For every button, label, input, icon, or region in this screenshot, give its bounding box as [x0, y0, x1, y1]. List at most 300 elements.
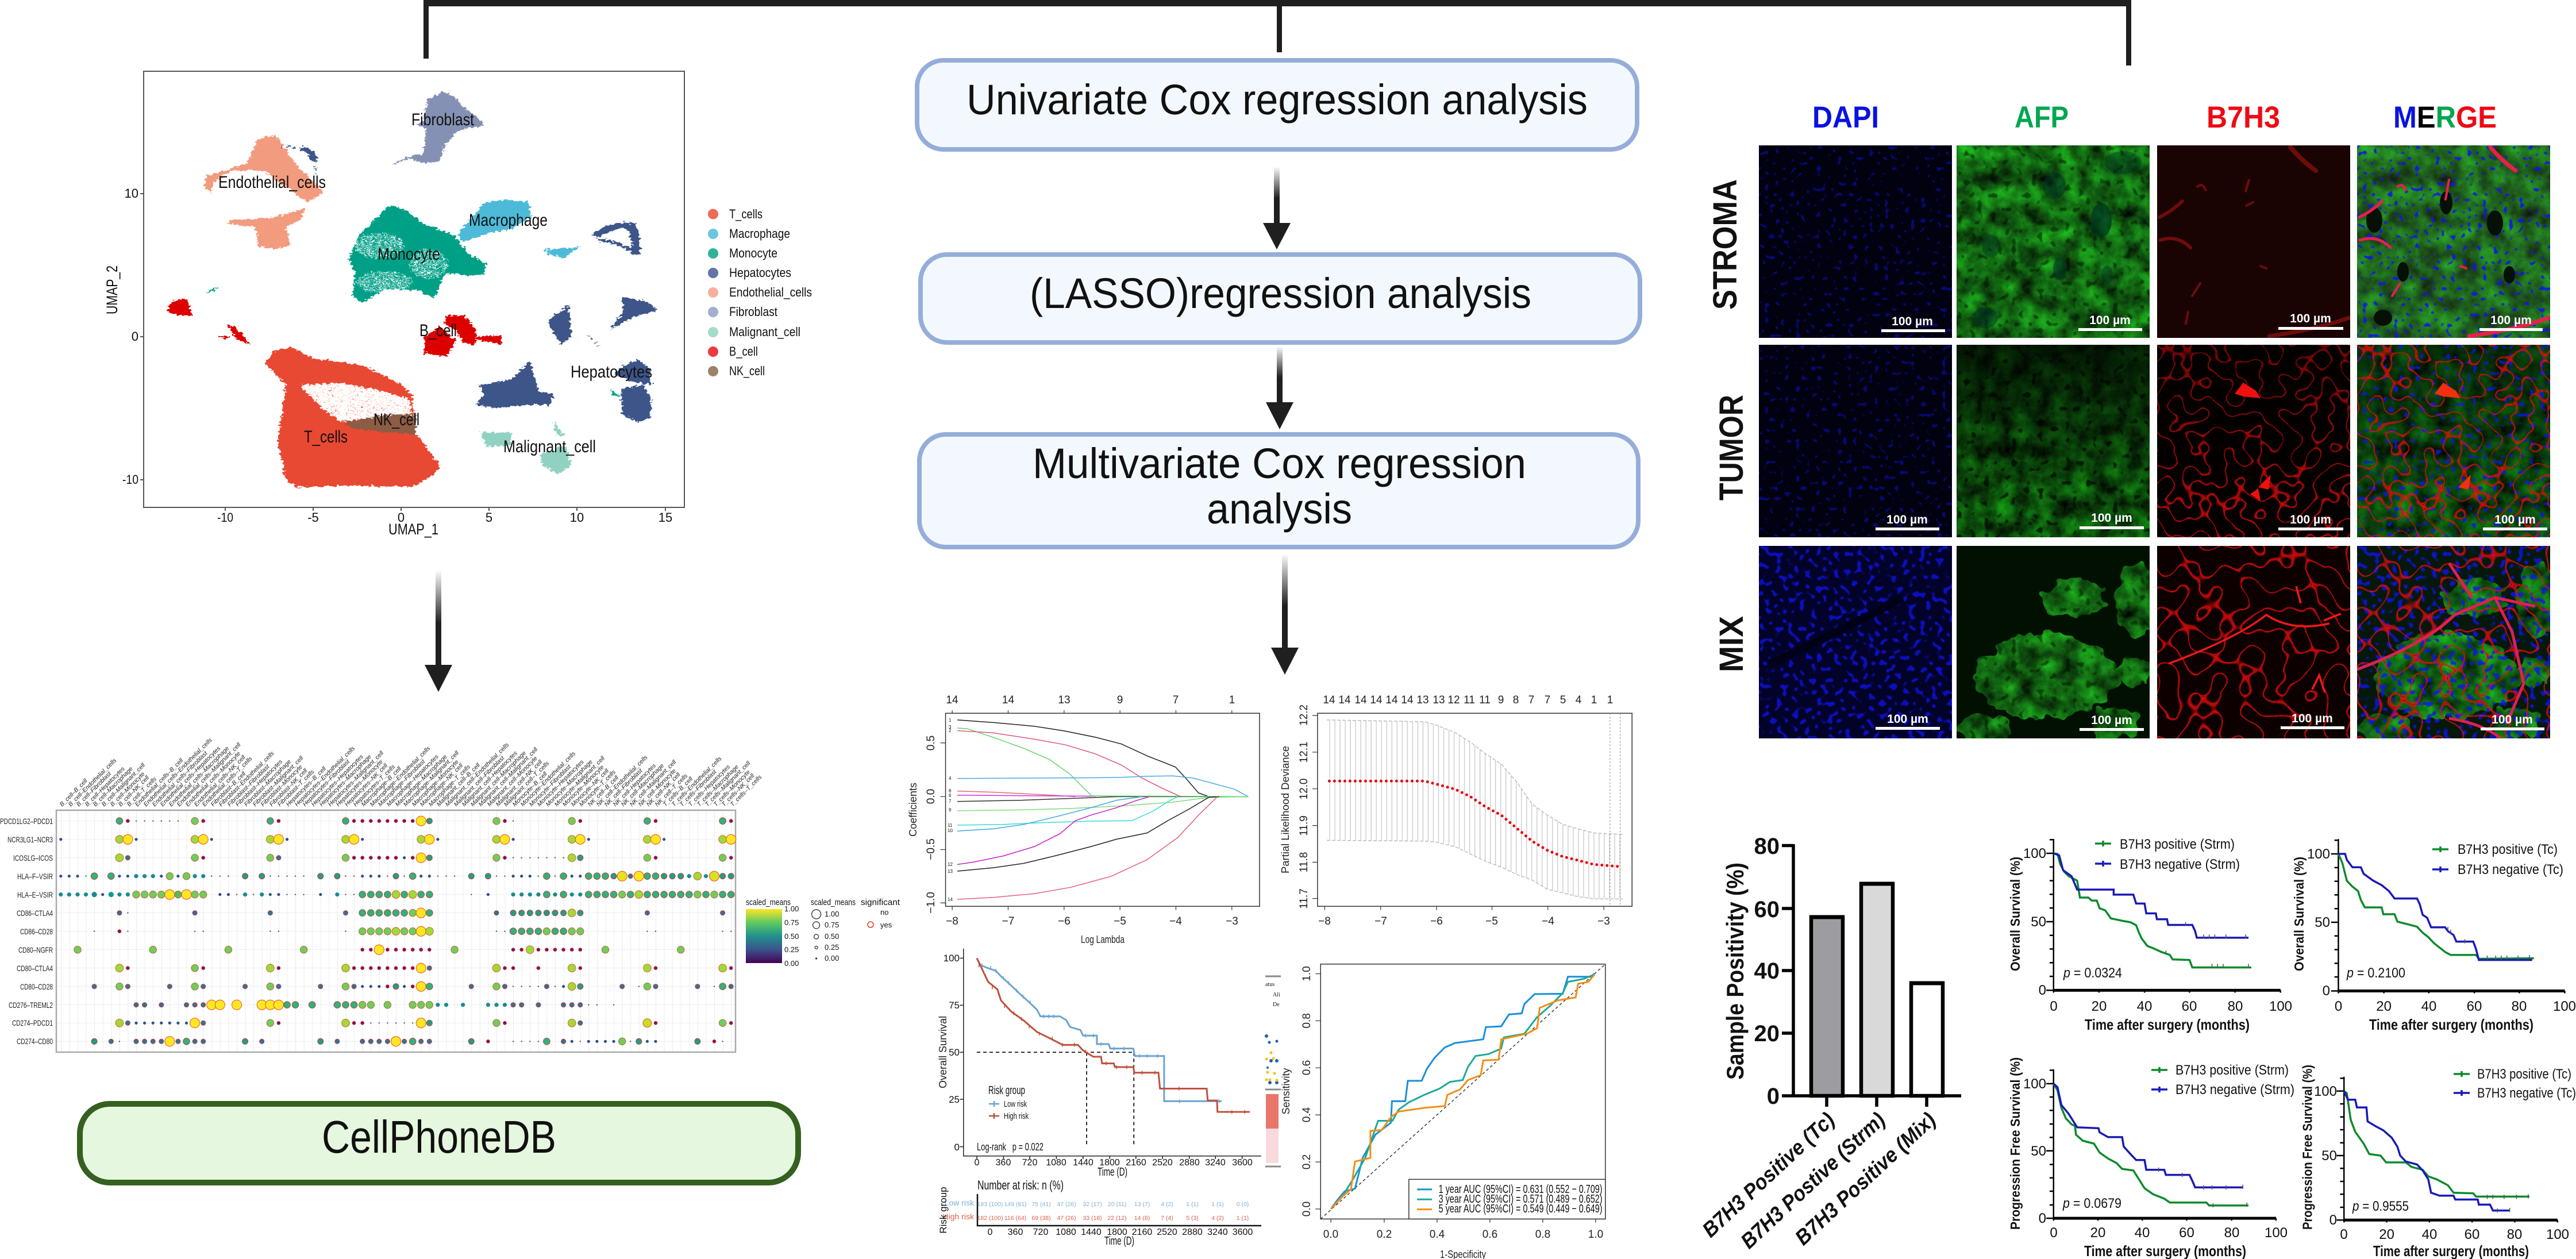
dot plot size legend: 1.00 [825, 910, 839, 918]
panel: sample positivity bar chart [1698, 834, 1961, 1253]
column labels: Endothelial_cells–Monocyte [184, 750, 242, 808]
axis numbers: 60 [2465, 1227, 2479, 1242]
column labels: NK_cell–B_cell [587, 774, 621, 808]
deviance curve with error bars [1312, 713, 1632, 910]
row labels [1707, 179, 1750, 672]
column labels: Malignant_cell–Monocyte [486, 755, 539, 808]
axis numbers [2023, 1076, 2288, 1241]
column labels: NK_cell–Malignant_cell [629, 759, 678, 808]
dot plot colour legend: scaled_means [746, 898, 791, 907]
column labels: Endothelial_cells–Malignant_cell [176, 741, 242, 808]
column labels: NK_cell–T_cells [654, 772, 690, 808]
deviance axis labels: 8 [1513, 694, 1519, 706]
axis numbers: 0 [2039, 1211, 2046, 1226]
KM axis labels: 3600 [1232, 1158, 1253, 1168]
coefficient axis labels: 13 [1058, 694, 1071, 706]
cluster: B cell [168, 299, 501, 357]
column labels: B_cell–NK_cell [117, 774, 151, 808]
UMAP cluster labels: T_cells [304, 428, 348, 446]
panel: LASSO cross-validation [1280, 694, 1632, 927]
KM axis labels: Time (D) [1098, 1166, 1127, 1179]
axis numbers: 20 [2379, 1227, 2394, 1242]
UMAP axes: 15 [659, 510, 672, 525]
survival curves [2337, 1077, 2558, 1222]
column labels: Endothelial_cells–Macrophage [168, 745, 230, 808]
panel: overall survival, tumor cells [2292, 839, 2576, 1033]
UMAP axes: -10 [217, 510, 233, 525]
column labels: Monocyte–Monocyte [561, 764, 606, 808]
UMAP legend: Hepatocytes [729, 265, 791, 280]
column labels: NK_cell–Monocyte [637, 768, 677, 808]
column labels: Endothelial_cells–B_cell [134, 757, 185, 808]
curve index labels: 2 [949, 728, 952, 733]
axis numbers: 100 [2553, 999, 2576, 1014]
ROC axis labels: 0.6 [1483, 1229, 1497, 1241]
column labels: Malignant_cell–B_cell [436, 761, 482, 808]
legend: B7H3 positive (Tc) [2458, 842, 2558, 857]
axis numbers [2307, 846, 2576, 1014]
deviance axis labels: 11.9 [1298, 815, 1310, 836]
dot plot significance legend: yes [880, 921, 892, 929]
p value: p = 0.0324 [2063, 965, 2122, 981]
UMAP cluster labels: B_cell [419, 321, 457, 340]
column labels: B_cell–Macrophage [92, 765, 134, 808]
axis numbers: 0 [2039, 983, 2046, 998]
low risk row: 0 (0) [1237, 1201, 1249, 1208]
row labels: MIX [1713, 616, 1750, 672]
T cells speckle [299, 383, 412, 421]
deviance axis labels: 14 [1401, 694, 1414, 706]
dot plot colour legend: 0.75 [784, 918, 799, 927]
axis titles: Time after surgery (months) [2369, 1016, 2533, 1033]
KM legend: Risk group [988, 1084, 1025, 1097]
box: multivariate Cox [919, 434, 1638, 547]
UMAP legend: Endothelial_cells [729, 285, 812, 299]
axis numbers: 0 [2329, 1212, 2337, 1228]
panel: progression free survival, tumor cells [2300, 1065, 2576, 1259]
axis numbers: 100 [2023, 1076, 2046, 1092]
high risk row: 33 (18) [1083, 1215, 1102, 1222]
arrow: UMAP to dot plot [425, 570, 452, 692]
coefficient axis labels: −8 [946, 915, 958, 927]
column labels: Monocyte–NK_cell [570, 767, 610, 808]
UMAP cluster labels: NK_cell [373, 410, 419, 429]
axis titles [2292, 857, 2533, 1033]
curve index labels: 7 [949, 799, 952, 804]
column labels: Hepatocytes–Hepatocytes [310, 753, 365, 808]
curve index labels [948, 718, 953, 902]
axis numbers: 0 [2050, 999, 2058, 1014]
row labels: HLA–F–VSIR [17, 872, 53, 881]
p value: p = 0.0679 [2062, 1196, 2121, 1211]
legend: B7H3 positive (Strm) [2120, 837, 2235, 852]
column labels: T_cells–B_cell [662, 775, 694, 808]
scale bars: 100 µm [2292, 712, 2333, 725]
deviance axis labels: 14 [1370, 694, 1383, 706]
axis titles: Overall Survival (%) [2292, 857, 2307, 971]
coefficient axis labels: 1 [1229, 694, 1235, 706]
high risk row: 22 (12) [1107, 1215, 1127, 1222]
row labels: CD80–CD28 [20, 982, 53, 991]
deviance axis labels: 11 [1479, 694, 1491, 706]
column labels: Fibroblast–Hepatocytes [234, 758, 284, 808]
scale bars: 100 µm [2290, 513, 2331, 526]
low risk row: 32 (17) [1083, 1201, 1102, 1208]
axis numbers: 50 [2321, 1148, 2337, 1164]
dot plot size legend: 0.00 [825, 954, 839, 962]
cluster: monocyte [206, 205, 621, 396]
legend [2454, 1067, 2576, 1101]
hepatocyte thin arcs [282, 147, 636, 348]
column labels: T_cells–NK_cell [721, 772, 756, 808]
UMAP legend: B_cell [729, 344, 758, 359]
column labels: NK_cell–Hepatocytes [612, 762, 658, 808]
axis numbers: 100 [2023, 846, 2046, 861]
log-rank p value: Log-rank p = 0.022 [977, 1141, 1044, 1153]
column labels: Monocyte–Fibroblast [528, 763, 573, 808]
axis numbers: 40 [2137, 999, 2152, 1014]
axis titles: Time after surgery (months) [2085, 1016, 2250, 1033]
column labels: Hepatocytes–Fibroblast [302, 758, 352, 808]
coefficient axis labels [907, 694, 1238, 945]
low risk row: 1 (1) [1186, 1201, 1199, 1208]
bar chart tick labels: 20 [1754, 1021, 1780, 1046]
low risk row: 47 (26) [1057, 1201, 1076, 1208]
axis numbers: 40 [2135, 1225, 2150, 1241]
deviance axis labels: −4 [1542, 915, 1554, 927]
column labels: Fibroblast–B_cell [210, 770, 248, 808]
curve index labels: 3 [949, 725, 952, 730]
panel: risk score sliver: De [1273, 1002, 1280, 1008]
coefficient axis labels: 0.5 [925, 736, 937, 750]
KM axis labels: 2520 [1152, 1158, 1173, 1168]
dot plot size legend: scaled_means [811, 898, 856, 907]
axis numbers: 0 [2335, 999, 2342, 1014]
column labels: Monocyte–Malignant_cell [553, 754, 606, 808]
column labels: Fibroblast–Endothelial_cells [218, 750, 276, 808]
high risk row: 5 (3) [1186, 1215, 1199, 1222]
bar chart y-axis title: Sample Positivity (%) [1722, 863, 1749, 1080]
panel: progression free survival, stroma [2008, 1057, 2294, 1259]
dot plot frame [56, 810, 736, 1052]
UMAP cluster labels: Monocyte [378, 245, 440, 264]
curve index labels: 10 [948, 828, 953, 833]
ROC legend text: 3 year AUC (95%CI) = 0.571 (0.489 − 0.652) [1439, 1193, 1603, 1206]
column labels: B_cell–Monocyte [109, 771, 147, 808]
column labels: Macrophage–B_cell [360, 765, 403, 808]
box: univariate Cox [917, 60, 1637, 149]
KM axis labels: 75 [949, 1000, 960, 1011]
sliver scatter dots [1265, 1034, 1279, 1084]
tile: stroma merge [2357, 145, 2550, 338]
bar chart tick labels: 0 [1767, 1084, 1780, 1109]
low risk row [945, 1198, 1249, 1208]
axis numbers: 0 [2050, 1225, 2058, 1241]
deviance axis labels: −5 [1485, 915, 1498, 927]
channel headers: DAPI [1812, 101, 1879, 134]
column labels: Macrophage–Hepatocytes [386, 753, 440, 808]
dot matrix [59, 816, 736, 1046]
bar top caps [1809, 884, 1944, 983]
dot plot significance legend [861, 898, 900, 929]
row labels [0, 817, 53, 1046]
column labels: Macrophage–Monocyte [411, 759, 460, 808]
deviance axis labels: −3 [1597, 915, 1610, 927]
ROC axis labels: 0.4 [1301, 1107, 1313, 1122]
column labels: Hepatocytes–NK_cell [344, 762, 390, 808]
column labels: Hepatocytes–B_cell [285, 765, 328, 808]
panel: immunofluorescence grid [1707, 101, 2550, 738]
dot plot significance legend: no [880, 908, 888, 917]
CellPhoneDB label box [80, 1104, 798, 1183]
ROC axis labels: 0.0 [1323, 1229, 1338, 1241]
column labels: Hepatocytes–Malignant_cell [327, 749, 385, 808]
low risk row: 1 (1) [1211, 1201, 1224, 1208]
deviance axis labels: 13 [1416, 694, 1429, 706]
cluster: macrophage [457, 200, 582, 257]
survival curves [2046, 1069, 2276, 1221]
bar chart category labels: B7H3 Positive (Tc) [1698, 1108, 1839, 1242]
deviance axis labels: 1 [1591, 694, 1597, 706]
column labels: Endothelial_cells–T_cells [201, 755, 254, 808]
KM axis labels: 25 [949, 1094, 960, 1105]
coefficient axis labels: 9 [1117, 694, 1123, 706]
column labels: Monocyte–B_cell [511, 771, 549, 808]
tile: tumor DAPI [1759, 345, 1952, 537]
channel headers: AFP [2015, 101, 2069, 134]
ROC axis labels: 0.8 [1301, 1013, 1313, 1029]
column labels: Fibroblast–Malignant_cell [252, 754, 305, 808]
axis numbers: 80 [2224, 1225, 2239, 1241]
deviance axis labels: 14 [1385, 694, 1398, 706]
axis numbers: 50 [2031, 914, 2046, 930]
deviance axis labels [1280, 694, 1613, 927]
column labels: B_cell–Endothelial_cells [67, 757, 118, 808]
UMAP cluster labels: Macrophage [469, 211, 548, 230]
risk table axis labels: 360 [1008, 1227, 1023, 1237]
risk table axis labels: 2880 [1182, 1227, 1203, 1237]
UMAP axes: 0 [398, 510, 405, 525]
axis numbers: 100 [2265, 1225, 2288, 1241]
deviance axis labels: 1 [1607, 694, 1613, 706]
UMAP axes: 10 [125, 186, 138, 201]
UMAP legend: Macrophage [729, 226, 790, 241]
scale bars: 100 µm [2089, 314, 2131, 327]
coefficient axis labels: Log Lambda [1081, 934, 1125, 945]
KM axis labels: 0 [954, 1142, 960, 1153]
coefficient axis labels: −3 [1226, 915, 1238, 927]
axis numbers: 60 [2179, 1225, 2194, 1241]
cluster: malignant cell [482, 421, 572, 474]
column labels: Monocyte–T_cells [578, 768, 617, 808]
cluster: endothelial cells [205, 135, 323, 249]
column labels: Malignant_cell–T_cells [503, 760, 551, 808]
column labels: T_cells–Hepatocytes [687, 763, 732, 808]
deviance axis labels: 14 [1323, 694, 1335, 706]
column labels: Macrophage–Macrophage [394, 753, 449, 808]
column labels: B_cell–Hepatocytes [84, 765, 126, 808]
ROC legend text: 1 year AUC (95%CI) = 0.631 (0.552 − 0.709) [1439, 1183, 1603, 1196]
ROC axis labels: 1.0 [1588, 1229, 1603, 1241]
tile: mix AFP [1957, 546, 2150, 738]
column labels: NK_cell–Endothelial_cells [595, 754, 649, 808]
scale bars: 100 µm [2494, 513, 2536, 526]
tile: stroma DAPI [1759, 145, 1952, 338]
column labels: Endothelial_cells–NK_cell [193, 754, 247, 808]
axis numbers: 100 [2314, 1084, 2337, 1099]
coefficient curves [941, 710, 1260, 910]
survival curves [2046, 839, 2281, 993]
coefficient axis labels: 0.0 [925, 789, 937, 804]
box: LASSO regression: (LASSO)regression analysis [1030, 269, 1531, 317]
row labels: CD274–CD80 [17, 1037, 53, 1046]
ROC axis labels: 0.4 [1430, 1229, 1445, 1241]
row labels: CD86–CD28 [20, 927, 53, 936]
UMAP axes: UMAP_1 [388, 521, 438, 538]
deviance axis labels: 12.0 [1298, 779, 1310, 799]
row labels: NCR3LG1–NCR3 [7, 835, 53, 844]
low risk row: 13 (7) [1134, 1201, 1150, 1208]
axis numbers: 20 [2376, 999, 2392, 1014]
KM axis labels [937, 953, 1253, 1179]
column labels: Macrophage–Fibroblast [377, 758, 427, 808]
KM axis labels: 50 [949, 1047, 960, 1058]
axis numbers: 80 [2507, 1227, 2522, 1242]
axis numbers [2314, 1084, 2569, 1242]
bar chart tick labels: 80 [1754, 834, 1780, 859]
risk table axis labels: 3600 [1233, 1227, 1253, 1237]
deviance axis labels: 14 [1338, 694, 1351, 706]
cluster: fibroblast [391, 91, 484, 165]
row labels: CD80–CTLA4 [17, 964, 53, 973]
panel: CellPhoneDB dot plot [0, 737, 900, 1052]
dot plot significance legend: significant [861, 898, 900, 907]
deviance axis labels: 4 [1576, 694, 1582, 706]
curve index labels: 11 [948, 823, 953, 828]
arrow: multivariate to plots [1271, 553, 1299, 675]
p value: p = 0.2100 [2346, 965, 2405, 981]
cluster: hepatocytes [476, 297, 659, 422]
deviance axis labels: 12.2 [1298, 704, 1310, 726]
coefficient axis labels: −7 [1002, 915, 1014, 927]
axis numbers: 100 [2546, 1227, 2569, 1242]
tile: stroma AFP [1957, 145, 2150, 338]
column labels: Malignant_cell–Fibroblast [453, 754, 506, 808]
risk table axis labels: 2520 [1157, 1227, 1177, 1237]
dot plot size legend: 0.50 [825, 932, 839, 941]
KM axis labels: 100 [944, 953, 960, 964]
column labels: NK_cell–Fibroblast [603, 767, 644, 808]
ROC axis labels: Sensitivity [1280, 1068, 1292, 1115]
UMAP axes: 0 [132, 329, 138, 344]
column labels: Fibroblast–Macrophage [243, 759, 292, 808]
column labels: Hepatocytes–Endothelial_cells [294, 745, 357, 808]
high risk row: 14 (8) [1134, 1215, 1150, 1222]
legend: B7H3 negative (Strm) [2120, 857, 2240, 872]
curve index labels: 13 [948, 869, 953, 874]
axis numbers [2023, 846, 2292, 1014]
axis numbers: 40 [2422, 1227, 2437, 1242]
high risk row: 1 (1) [1237, 1215, 1249, 1222]
risk table axis labels: 0 [988, 1227, 993, 1237]
risk table axis labels: 2160 [1132, 1227, 1152, 1237]
bar chart category labels: B7H3 Postive (Strm) [1736, 1108, 1889, 1253]
column labels: B_cell–Malignant_cell [101, 761, 147, 808]
axis numbers: 0 [2323, 983, 2330, 999]
tile: mix B7H3 [2157, 546, 2350, 738]
column labels: B_cell–B_cell [59, 777, 89, 808]
legend: B7H3 negative (Tc) [2458, 862, 2563, 877]
coefficient axis labels: 14 [946, 694, 958, 706]
deviance axis labels: 11 [1464, 694, 1475, 706]
column labels: Fibroblast–NK_cell [268, 767, 309, 808]
ROC axis labels: 0.2 [1377, 1229, 1392, 1241]
axis titles [2300, 1065, 2529, 1259]
column labels: Monocyte–Macrophage [545, 759, 594, 808]
risk table axis labels: 1440 [1081, 1227, 1102, 1237]
tile: tumor AFP [1957, 345, 2150, 537]
high risk row: 116 (64) [1004, 1215, 1026, 1222]
panel: risk score sliver: Ali [1273, 992, 1280, 998]
high risk row: 69 (38) [1031, 1215, 1051, 1222]
coefficient axis labels: −1.0 [925, 892, 937, 914]
row labels: CD86–CTLA4 [17, 908, 53, 918]
UMAP legend [708, 207, 812, 378]
scale bars: 100 µm [1886, 513, 1928, 526]
panel: number at risk table: Number at risk: n (%) [977, 1178, 1064, 1192]
deviance axis labels: 14 [1354, 694, 1367, 706]
axis numbers: 40 [2421, 999, 2436, 1014]
axis numbers: 20 [2092, 999, 2107, 1014]
UMAP legend: Fibroblast [729, 305, 777, 319]
legend: B7H3 positive (Strm) [2175, 1062, 2289, 1078]
panel: number at risk table [938, 1178, 1261, 1248]
deviance axis labels: 12 [1447, 694, 1460, 706]
ROC plot [1315, 964, 1605, 1223]
risk table axis labels: 1080 [1056, 1227, 1076, 1237]
risk table axis labels: 1800 [1107, 1227, 1127, 1237]
coefficient axis labels: 7 [1173, 694, 1179, 706]
arrow: univariate to LASSO [1263, 167, 1291, 249]
low risk row: 183 (100) [977, 1201, 1003, 1208]
UMAP legend: T_cells [729, 207, 763, 221]
column labels: Fibroblast–T_cells [276, 768, 316, 808]
UMAP clusters [168, 91, 659, 487]
ROC axis labels: 1.0 [1301, 966, 1313, 981]
tile: tumor B7H3 [2157, 345, 2350, 537]
axis numbers: 60 [2182, 999, 2197, 1014]
column labels: Malignant_cell–Hepatocytes [461, 749, 519, 808]
column labels: Macrophage–Endothelial_cells [369, 745, 432, 808]
panel: UMAP scatter plot [103, 71, 812, 538]
KM axis labels: 1440 [1073, 1158, 1093, 1168]
UMAP cluster labels: Malignant_cell [503, 437, 596, 456]
KM axis labels: 3240 [1205, 1158, 1226, 1168]
KM legend: Low risk [1004, 1099, 1027, 1109]
coefficient axis labels: −0.5 [925, 838, 937, 860]
scale bars: 100 µm [1887, 713, 1928, 726]
column labels: Malignant_cell–Malignant_cell [478, 746, 540, 808]
panel: time-dependent ROC curves [1280, 964, 1605, 1259]
bar chart tick labels [1754, 834, 1780, 1109]
column labels: Fibroblast–Monocyte [260, 764, 304, 808]
column labels: Macrophage–NK_cell [419, 762, 465, 808]
ROC axis labels: 0.0 [1301, 1202, 1313, 1216]
UMAP legend: NK_cell [729, 364, 765, 378]
panel: risk score sliver: atus [1265, 981, 1274, 988]
curve index labels: 12 [948, 862, 953, 867]
deviance axis labels: 5 [1560, 694, 1566, 706]
